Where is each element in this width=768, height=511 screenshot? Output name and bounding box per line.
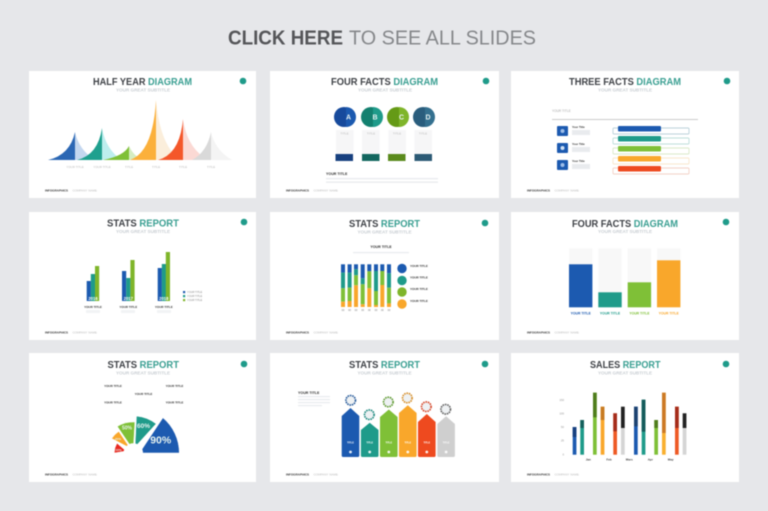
main heading: CLICK HERE — [228, 28, 343, 50]
icon list: Your Title — [572, 159, 585, 163]
month labels: May — [668, 458, 674, 462]
cards: B — [372, 114, 378, 122]
badge — [241, 219, 247, 225]
subtitle: YOUR GREAT SUBTITLE — [116, 229, 170, 234]
footer: INFOGRAPHICS COMPANY NAME — [286, 320, 338, 338]
grouped bar chart: YOUR TITLE — [119, 305, 137, 309]
area peaks chart — [48, 100, 232, 160]
callout labels: YOUR TITLE — [166, 384, 183, 388]
panel: three facts diagram — [511, 71, 739, 198]
arrow columns: TITLE — [423, 442, 431, 444]
panel: stats report fan chart — [29, 353, 256, 482]
panel: sales report — [511, 353, 739, 482]
legend: YOUR TITLE — [187, 298, 202, 302]
bar labels: YOUR TITLE — [629, 312, 650, 316]
arrow columns: TITLE — [404, 442, 412, 444]
fan chart: 20% — [115, 437, 121, 441]
bar labels — [571, 312, 680, 316]
bar labels: YOUR TITLE — [600, 312, 621, 316]
badge — [482, 220, 488, 226]
panel: stats report arrows — [270, 353, 499, 482]
footer: INFOGRAPHICS COMPANY NAME — [286, 462, 338, 480]
badge — [241, 361, 247, 367]
icon list: Your Title — [572, 142, 585, 146]
y axis labels: 50 — [561, 425, 564, 429]
fan chart: 90% — [150, 434, 172, 446]
arrow columns: TITLE — [385, 442, 393, 444]
text block: YOUR TITLE — [298, 391, 320, 395]
chart title — [353, 245, 409, 253]
arrow columns — [342, 405, 455, 457]
footer: INFOGRAPHICS COMPANY NAME — [286, 178, 338, 196]
heading: HALF YEAR DIAGRAM — [93, 76, 192, 88]
month labels — [586, 458, 674, 462]
text block: YOUR TITLE — [326, 172, 348, 176]
badge — [240, 78, 246, 84]
badge — [482, 361, 488, 367]
legend: YOUR TITLE — [187, 294, 202, 298]
legend circles — [397, 264, 428, 309]
y axis labels: 25 — [561, 438, 564, 442]
stacked bar chart: 00 — [355, 309, 358, 312]
fan chart: 60% — [137, 423, 150, 430]
grouped bar chart: YOUR TITLE — [155, 305, 173, 309]
axis labels: TITLE — [207, 165, 215, 169]
callout labels: YOUR TITLE — [135, 392, 152, 396]
outlined bars — [613, 126, 689, 174]
callout labels — [104, 384, 183, 404]
cards: TITLE — [419, 132, 427, 136]
panel: half year diagram — [29, 71, 256, 198]
footer: INFOGRAPHICS COMPANY NAME — [45, 320, 97, 338]
y axis labels: 150 — [559, 398, 564, 402]
subtitle: YOUR GREAT SUBTITLE — [116, 88, 170, 92]
grouped bar chart: 2018 — [159, 296, 169, 301]
grouped bar chart: YOUR TITLE — [84, 305, 102, 309]
bar chart — [569, 248, 680, 307]
panel: stats report stacked bars — [270, 212, 499, 340]
heading: STATS REPORT — [349, 359, 421, 371]
cards: C — [399, 114, 404, 122]
main heading — [228, 28, 536, 50]
cards: D — [425, 114, 431, 122]
arrow columns: TITLE — [347, 442, 354, 444]
axis labels: TITLE — [152, 165, 160, 169]
cards: TITLE — [367, 132, 375, 136]
fan chart: 50% — [122, 426, 133, 432]
stacked bar chart: 00 — [388, 309, 391, 312]
month labels: Feb — [606, 458, 612, 462]
callout labels: YOUR TITLE — [104, 400, 122, 404]
chart title: YOUR TITLE — [370, 245, 392, 249]
y axis labels: 0 — [562, 452, 564, 456]
subtitle: YOUR GREAT SUBTITLE — [598, 229, 652, 234]
subtitle: YOUR GREAT SUBTITLE — [357, 370, 412, 376]
badge — [723, 219, 729, 225]
footer: INFOGRAPHICS COMPANY NAME — [45, 462, 97, 480]
panel: stats report grouped bars — [29, 212, 256, 340]
heading: FOUR FACTS DIAGRAM — [572, 218, 678, 230]
stacked column chart — [573, 393, 686, 455]
cards — [334, 107, 435, 161]
main heading: TO SEE ALL SLIDES — [349, 28, 536, 50]
subtitle: YOUR GREAT SUBTITLE — [598, 88, 652, 92]
heading: STATS REPORT — [108, 359, 180, 371]
badge — [723, 361, 729, 367]
subtitle: YOUR GREAT SUBTITLE — [598, 370, 652, 376]
month labels: Jan — [586, 458, 591, 462]
stacked bar chart: 00 — [375, 309, 378, 312]
heading: THREE FACTS DIAGRAM — [569, 76, 681, 88]
grouped bar chart — [84, 252, 173, 313]
callout labels: YOUR TITLE — [104, 384, 122, 388]
stacked bar chart — [341, 264, 391, 312]
badge — [483, 78, 489, 84]
heading: FOUR FACTS DIAGRAM — [331, 76, 438, 88]
legend circles: YOUR TITLE — [410, 287, 428, 291]
legend — [183, 290, 202, 302]
percent rings — [346, 393, 451, 420]
stacked bar chart: 00 — [348, 309, 352, 312]
axis labels: TITLE — [179, 165, 187, 169]
fan chart — [110, 416, 182, 457]
axis labels: TITLE — [125, 165, 133, 169]
panel: four facts bars — [511, 212, 739, 340]
month labels: Mars — [626, 458, 633, 462]
legend circles: YOUR TITLE — [410, 299, 428, 303]
callout labels: YOUR TITLE — [166, 400, 183, 404]
section title: YOUR TITLE — [552, 109, 571, 113]
subtitle: YOUR GREAT SUBTITLE — [358, 88, 412, 92]
cards: A — [346, 114, 351, 122]
legend circles: YOUR TITLE — [410, 264, 428, 268]
stacked bar chart: 00 — [361, 309, 365, 312]
legend: YOUR TITLE — [187, 290, 202, 294]
month labels: Apr — [648, 458, 654, 462]
stacked bar chart: 00 — [381, 309, 384, 312]
axis labels: YOUR TITLE — [93, 165, 111, 169]
icon list — [557, 125, 590, 170]
axis labels: YOUR TITLE — [66, 165, 84, 169]
fan chart: 10% — [115, 448, 122, 452]
text block — [326, 172, 438, 183]
icon list: Your Title — [572, 125, 585, 129]
y axis labels — [559, 398, 564, 456]
badge — [724, 78, 730, 84]
heading: SALES REPORT — [590, 359, 661, 371]
axis labels — [66, 165, 215, 169]
subtitle: YOUR GREAT SUBTITLE — [116, 370, 170, 376]
legend circles: YOUR TITLE — [410, 276, 428, 280]
subtitle: YOUR GREAT SUBTITLE — [357, 230, 412, 234]
stacked bar chart: 00 — [368, 309, 371, 312]
arrow columns: TITLE — [366, 442, 373, 444]
grouped bar chart: 2017 — [124, 296, 134, 301]
footer: INFOGRAPHICS COMPANY NAME — [45, 178, 97, 196]
panel: four facts diagram — [270, 71, 499, 198]
arrow columns: TITLE — [443, 442, 450, 444]
footer: INFOGRAPHICS COMPANY NAME — [527, 178, 579, 196]
cards: TITLE — [340, 132, 349, 136]
stacked bar chart: 00 — [342, 309, 345, 312]
bar labels: YOUR TITLE — [571, 312, 592, 316]
heading: STATS REPORT — [349, 218, 421, 230]
grouped bar chart: 2016 — [88, 296, 98, 301]
footer: INFOGRAPHICS COMPANY NAME — [527, 320, 579, 338]
cards: TITLE — [393, 132, 401, 136]
footer: INFOGRAPHICS COMPANY NAME — [527, 462, 579, 480]
bar labels: YOUR TITLE — [659, 312, 680, 316]
heading: STATS REPORT — [107, 218, 180, 230]
y axis labels: 100 — [559, 412, 564, 416]
text block — [298, 391, 330, 406]
